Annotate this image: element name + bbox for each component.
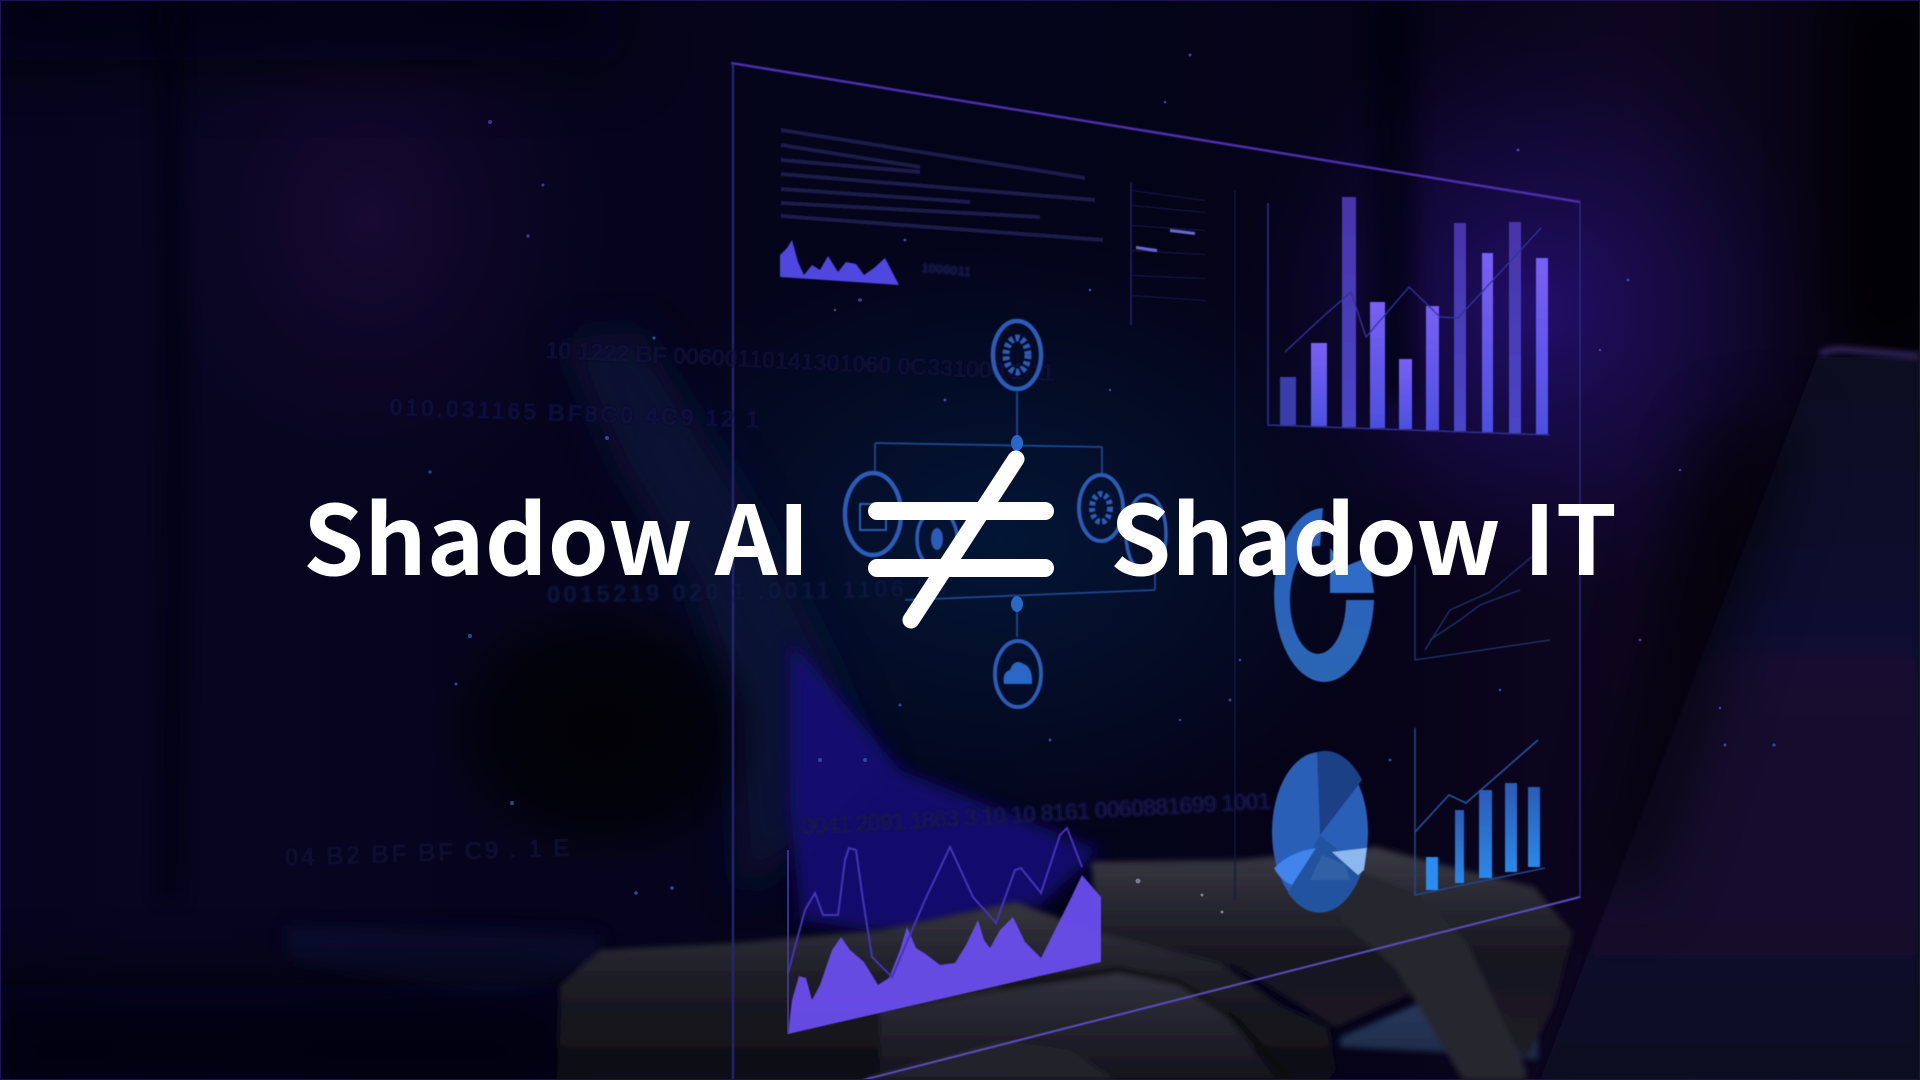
index finger — [1340, 870, 1526, 1080]
pie chart — [1272, 751, 1368, 913]
flow diagram — [845, 321, 1166, 707]
small line chart — [1415, 550, 1550, 660]
laptop — [1540, 350, 1920, 1080]
flow nodes — [1011, 435, 1023, 612]
not-equal symbol — [877, 459, 1045, 620]
back hand — [1091, 847, 1573, 1060]
donut chart — [1274, 508, 1374, 682]
faint panel text lines — [781, 128, 1205, 301]
keyboard — [1340, 990, 1538, 1060]
left arm and hand — [557, 902, 1336, 1080]
icon: right gear circle — [1079, 475, 1123, 541]
scattered data particles — [428, 54, 1776, 914]
front finger — [880, 973, 1277, 1080]
purple area chart, bottom left — [788, 828, 1101, 1034]
holographic panel frame — [731, 63, 1580, 1080]
binary text stream, upper: 10 1222 BF 00600110141301060 0C331000 1 11 — [545, 337, 1055, 387]
person silhouette — [0, 0, 1100, 1080]
icon: circle behind title — [1126, 495, 1166, 573]
icon: dollar circle — [917, 510, 957, 568]
bar chart, top right of panel — [1268, 197, 1550, 435]
icon: cloud circle — [995, 641, 1041, 707]
title: Shadow IT: Shadow IT — [1110, 464, 1617, 603]
binary text stream, left: 010.031165 BF8C0 4C9 12 1 — [389, 394, 760, 434]
small bar chart, bottom right — [1415, 728, 1545, 895]
icon: left circle — [845, 473, 901, 555]
binary text stream, lower left: 04 B2 BF BF C9 . 1 E — [284, 834, 570, 872]
small area chart, top left of panel: 1000011 — [921, 260, 972, 279]
title: Shadow AI: Shadow AI — [303, 464, 810, 603]
icon: gear circle — [993, 321, 1041, 389]
small area chart, top left of panel — [780, 240, 972, 285]
lowest finger — [860, 1040, 1115, 1080]
binary text stream, middle: 0015219 020 1 .0011 1106 30 — [547, 575, 947, 609]
finger gap — [1000, 970, 1290, 1080]
hands on keyboard — [557, 847, 1573, 1080]
binary text stream, lower: 0041 2091 1863 3 10 10 8161 0060881699 1001 — [801, 788, 1272, 841]
